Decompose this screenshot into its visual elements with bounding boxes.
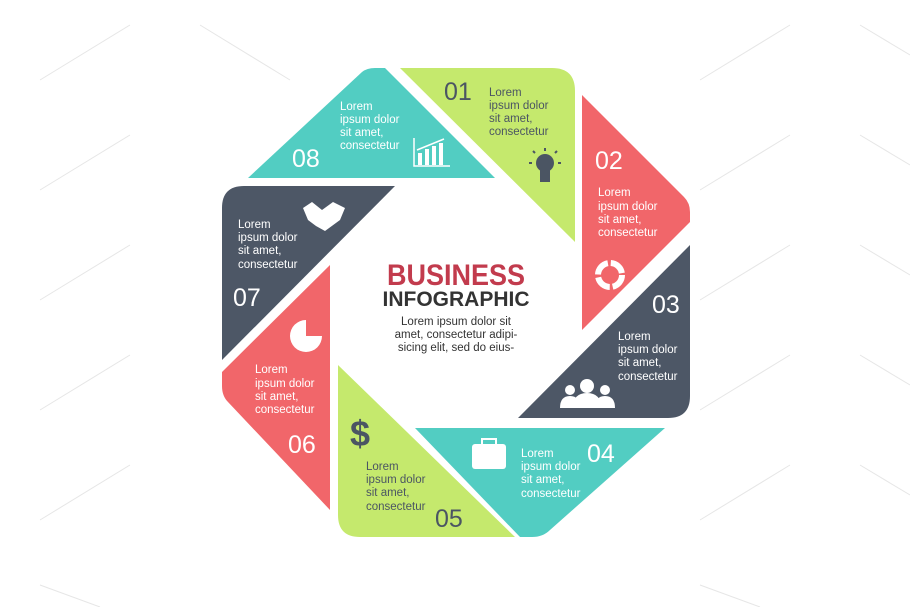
title: INFOGRAPHIC	[382, 288, 530, 311]
segment 02 red: ipsum dolor	[598, 201, 658, 213]
segment 03 grey: 03	[652, 291, 680, 319]
segment 04 teal: 04	[587, 440, 615, 468]
icon: dollar: $	[350, 413, 370, 454]
segment 02 red: 02	[595, 147, 623, 175]
segment 04 teal: ipsum dolor	[521, 461, 581, 473]
segment 04 teal: sit amet,	[521, 474, 564, 486]
segment 04 teal: consectetur	[521, 488, 581, 500]
segment 06 red: consectetur	[255, 404, 315, 416]
segment 02 red: sit amet,	[598, 214, 641, 226]
icon: lightbulb	[529, 148, 561, 182]
segment 03 grey: Lorem	[618, 331, 651, 343]
segment 04 teal	[415, 428, 665, 537]
segment 07 grey	[222, 186, 395, 360]
segment 04 teal: Lorem	[521, 448, 554, 460]
segment 07 grey: sit amet,	[238, 245, 281, 257]
description: amet, consectetur adipi-	[395, 329, 518, 341]
segment 03 grey	[518, 245, 690, 418]
segment 08 teal: sit amet,	[340, 127, 383, 139]
segment 03 grey: ipsum dolor	[618, 344, 678, 356]
segment 02 red	[582, 95, 690, 330]
icon: briefcase	[472, 439, 506, 469]
segment 07 grey: ipsum dolor	[238, 232, 298, 244]
segment 05 green: consectetur	[366, 501, 426, 513]
segment 01 green: sit amet,	[489, 113, 532, 125]
segment 06 red: Lorem	[255, 364, 288, 376]
title	[382, 259, 530, 354]
segment 05 green: sit amet,	[366, 487, 409, 499]
segment 08 teal: Lorem	[340, 101, 373, 113]
icon: bar chart	[414, 138, 450, 166]
icon: handshake	[303, 202, 345, 231]
segment 01 green: Lorem	[489, 87, 522, 99]
segment 08 teal: ipsum dolor	[340, 114, 400, 126]
segment 03 grey: consectetur	[618, 371, 678, 383]
segment 02 red: Lorem	[598, 187, 631, 199]
icon: people	[560, 379, 615, 408]
segment 05 green	[338, 365, 515, 537]
segment 06 red: 06	[288, 431, 316, 459]
segment 08 teal	[248, 68, 495, 178]
segment 05 green: Lorem	[366, 461, 399, 473]
segment 07 grey: Lorem	[238, 219, 271, 231]
segment 01 green	[400, 68, 575, 242]
segment 06 red: ipsum dolor	[255, 378, 315, 390]
segment 05 green: ipsum dolor	[366, 474, 426, 486]
description: sicing elit, sed do eius-	[398, 342, 514, 354]
title: BUSINESS	[387, 259, 525, 292]
segment 07 grey: 07	[233, 284, 261, 312]
segment 02 red: consectetur	[598, 227, 658, 239]
segment 07 grey: consectetur	[238, 259, 298, 271]
description: Lorem ipsum dolor sit	[401, 316, 512, 328]
icon: cycle	[598, 263, 622, 287]
segment 01 green: consectetur	[489, 126, 549, 138]
segment 05 green: 05	[435, 505, 463, 533]
segment 01 green: 01	[444, 78, 472, 106]
segment 06 red	[222, 265, 330, 510]
segment 08 teal: consectetur	[340, 140, 400, 152]
segment 03 grey: sit amet,	[618, 357, 661, 369]
segment 08 teal: 08	[292, 145, 320, 173]
segment 01 green: ipsum dolor	[489, 100, 549, 112]
segment 06 red: sit amet,	[255, 391, 298, 403]
icon: pie	[290, 320, 322, 352]
